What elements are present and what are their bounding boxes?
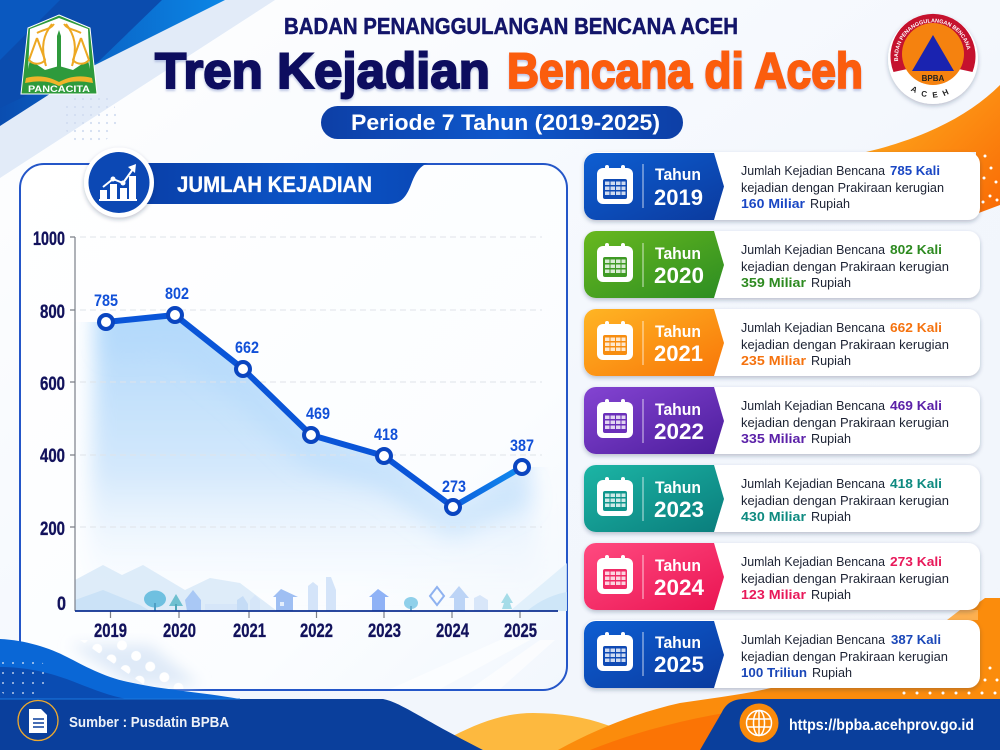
card: 2019: 785 Kali [890, 163, 940, 178]
logo: Aceh Pancacita [21, 15, 97, 95]
card: 2023: Jumlah Kejadian Bencana [741, 476, 886, 491]
y-axis labels: 1000 [33, 229, 65, 250]
tree [237, 596, 248, 611]
card: 2020: kejadian dengan Prakiraan kerugian [741, 259, 949, 274]
card: 2025: 100 Triliun [741, 665, 807, 680]
data value labels [94, 284, 534, 496]
x-axis labels: 2023 [368, 621, 401, 642]
logo: Aceh Pancacita: PANCACITA [28, 84, 90, 95]
card: 2024: Rupiah [811, 587, 851, 602]
x-axis labels: 2022 [300, 621, 333, 642]
house [369, 589, 389, 611]
data value labels: 273 [442, 477, 466, 496]
card: 2022: 469 Kali [890, 398, 942, 413]
card: 2019: Tahun [655, 165, 701, 184]
x-axis labels: 2019 [94, 621, 127, 642]
y-axis labels: 400 [40, 446, 65, 467]
data value labels: 802 [165, 284, 189, 303]
card: 2023: 418 Kali [890, 476, 942, 491]
card: 2024: 123 Miliar [741, 587, 806, 602]
y-axis labels: 0 [57, 594, 66, 615]
card: 2020: Rupiah [811, 275, 851, 290]
panel heading banner: JUMLAH KEJADIAN [177, 172, 372, 197]
card: 2020: 359 Miliar [741, 275, 806, 290]
footer: website: https://bpba.acehprov.go.id [789, 717, 974, 734]
main title: Tren Kejadian [155, 43, 490, 99]
organisation heading: BADAN PENANGGULANGAN BENCANA ACEH [284, 13, 738, 39]
card: 2022: Rupiah [811, 431, 851, 446]
gate [430, 587, 444, 605]
footer dots [902, 666, 998, 694]
house [185, 590, 201, 611]
logo: BPBA: ACEH [910, 86, 949, 98]
data line [106, 315, 522, 507]
card: 2021: Tahun [655, 322, 701, 341]
card: 2019: Rupiah [810, 196, 850, 211]
card: 2022: 335 Miliar [741, 431, 806, 446]
card: 2025 [584, 620, 980, 688]
x-axis labels: 2021 [233, 621, 266, 642]
y-axis labels: 200 [40, 519, 65, 540]
x-axis labels: 2024 [436, 621, 469, 642]
orange top-right wave [866, 85, 1000, 214]
card: 2019: 160 Miliar [741, 196, 805, 211]
card: 2024: kejadian dengan Prakiraan kerugian [741, 571, 949, 586]
data value labels: 785 [94, 291, 118, 310]
card: 2025: Tahun [655, 633, 701, 652]
orange dots decoration [982, 154, 998, 204]
card: 2025: 2025 [654, 652, 704, 677]
logo: BPBA [886, 14, 980, 108]
card: 2022: 2022 [654, 419, 704, 444]
card: 2024: Jumlah Kejadian Bencana [741, 554, 886, 569]
data value labels: 418 [374, 425, 398, 444]
card: 2023: 2023 [654, 497, 704, 522]
card: 2024: Tahun [655, 556, 701, 575]
subtitle pill [321, 106, 683, 139]
card: 2021: 2021 [654, 341, 703, 366]
tree [501, 593, 513, 609]
card: 2021: 662 Kali [890, 320, 942, 335]
panel: jumlah kejadian [20, 148, 567, 690]
chart: jumlah kejadian line chart [33, 229, 567, 642]
card: 2025: Jumlah Kejadian Bencana [741, 632, 886, 647]
small house [474, 595, 488, 611]
footer: website [700, 699, 1000, 750]
data value labels: 662 [235, 338, 259, 357]
bottom orange waves [453, 598, 1000, 750]
card: 2023: 430 Miliar [741, 509, 806, 524]
card: 2021: kejadian dengan Prakiraan kerugian [741, 337, 949, 352]
x-axis labels: 2025 [504, 621, 537, 642]
main title: Bencana di Aceh [507, 43, 863, 99]
card: 2019: 2019 [654, 185, 703, 210]
tree [169, 594, 183, 611]
card: 2022: kejadian dengan Prakiraan kerugian [741, 415, 949, 430]
card: 2024 [584, 543, 980, 610]
tree [144, 590, 166, 611]
card: 2024: 273 Kali [890, 554, 942, 569]
landscape illustration [75, 563, 567, 611]
house [449, 586, 469, 611]
card: 2021: Rupiah [811, 353, 851, 368]
panel lower-left dotted band [70, 640, 200, 689]
y-axis labels: 800 [40, 302, 65, 323]
card: 2019: kejadian dengan Prakiraan kerugian [741, 180, 944, 195]
card: 2021: Jumlah Kejadian Bencana [741, 320, 886, 335]
gridlines [80, 237, 542, 527]
card: 2020: Jumlah Kejadian Bencana [741, 242, 886, 257]
panel heading banner [140, 163, 428, 204]
subtitle pill: Periode 7 Tahun (2019-2025) [351, 110, 660, 135]
card: 2019 [584, 152, 980, 220]
icon: globe [740, 704, 778, 742]
card: 2023: kejadian dengan Prakiraan kerugian [741, 493, 949, 508]
bottom-left blue wave [0, 639, 240, 705]
x-axis labels: 2020 [163, 621, 196, 642]
card: 2024: 2024 [654, 575, 705, 600]
y-axis labels [33, 229, 66, 615]
card: 2025: kejadian dengan Prakiraan kerugian [741, 649, 948, 664]
towers [308, 577, 336, 611]
y-axis labels: 600 [40, 374, 65, 395]
tree [404, 597, 418, 611]
card: 2023 [584, 465, 980, 532]
data value labels: 469 [306, 404, 330, 423]
card: 2022 [584, 387, 980, 454]
card: 2022: Jumlah Kejadian Bencana [741, 398, 886, 413]
top-left blue corner shape [0, 0, 275, 178]
card: 2025: 387 Kali [891, 632, 941, 647]
x-axis labels [94, 621, 537, 642]
footer: source [0, 699, 483, 750]
card: 2025: Rupiah [812, 665, 852, 680]
card: 2019: Jumlah Kejadian Bencana [741, 163, 886, 178]
card: 2020 [584, 231, 980, 298]
chart area fill [82, 318, 540, 555]
low buildings [205, 595, 260, 611]
panel stripes [390, 640, 555, 689]
card: 2023: Tahun [655, 478, 701, 497]
data points [99, 308, 529, 514]
card: 2023: Rupiah [811, 509, 851, 524]
logo: BPBA: BADAN PENANGGULANGAN BENCANA [894, 18, 970, 62]
logo: BPBA: BPBA [922, 74, 945, 83]
footer: source: Sumber : Pusdatin BPBA [69, 714, 229, 731]
card: 2020: Tahun [655, 244, 701, 263]
data value labels: 387 [510, 436, 534, 455]
axes [70, 237, 520, 618]
main title [155, 43, 863, 99]
card: 2021: 235 Miliar [741, 353, 806, 368]
house [273, 589, 298, 611]
card: 2022: Tahun [655, 400, 701, 419]
card: 2020: 2020 [654, 263, 704, 288]
card: 2021 [584, 309, 980, 376]
icon: document [18, 700, 58, 740]
card: 2020: 802 Kali [890, 242, 942, 257]
icon: rising bar chart [84, 148, 154, 218]
